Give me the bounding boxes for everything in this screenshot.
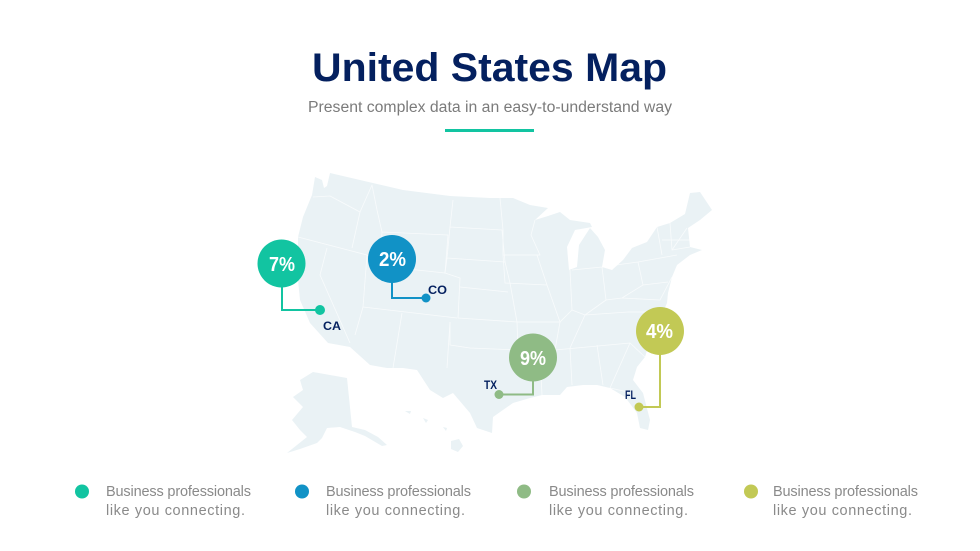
legend item 1 (75, 484, 251, 519)
connector line (282, 285, 320, 310)
map: contiguous states (298, 173, 712, 433)
percentage value: 4% (646, 321, 673, 343)
location dot (634, 402, 644, 412)
legend item 3 (517, 484, 694, 519)
legend dot (295, 484, 309, 498)
marker: California 7% (258, 240, 341, 333)
connector line (639, 352, 660, 407)
connector line (392, 280, 426, 298)
legend text: like you connecting. (106, 503, 245, 519)
location dot (422, 294, 430, 302)
legend text: like you connecting. (549, 503, 688, 519)
legend item 2 (295, 484, 471, 519)
percentage bubble (258, 240, 306, 288)
state label: TX (484, 378, 497, 392)
title underline (445, 129, 534, 132)
legend text: Business professionals (773, 484, 918, 500)
map: Hawaii (405, 411, 463, 452)
marker: Florida 4% (625, 307, 684, 412)
legend text: like you connecting. (773, 503, 912, 519)
legend dot (744, 484, 758, 498)
state label: CO (428, 283, 447, 297)
location dot (315, 305, 325, 315)
percentage value: 9% (520, 348, 546, 370)
legend item 4 (744, 484, 918, 519)
map: United States (287, 173, 712, 453)
percentage bubble (368, 235, 416, 283)
map: state borders (298, 185, 690, 395)
legend dot (75, 484, 89, 498)
title: United States Map (312, 46, 667, 90)
percentage value: 7% (269, 254, 295, 276)
legend dot (517, 484, 531, 498)
percentage bubble (509, 334, 557, 382)
legend text: Business professionals (106, 484, 251, 500)
state label: CA (323, 319, 341, 333)
marker: Colorado 2% (368, 235, 447, 302)
legend text: like you connecting. (326, 503, 465, 519)
percentage bubble (636, 307, 684, 355)
state label: FL (625, 388, 636, 402)
map: Alaska (287, 372, 387, 453)
subtitle: Present complex data in an easy-to-understand way (308, 99, 672, 116)
location dot (494, 390, 504, 399)
legend text: Business professionals (549, 484, 694, 500)
legend text: Business professionals (326, 484, 471, 500)
connector line (499, 378, 533, 394)
percentage value: 2% (379, 249, 406, 271)
marker: Texas 9% (484, 334, 557, 399)
